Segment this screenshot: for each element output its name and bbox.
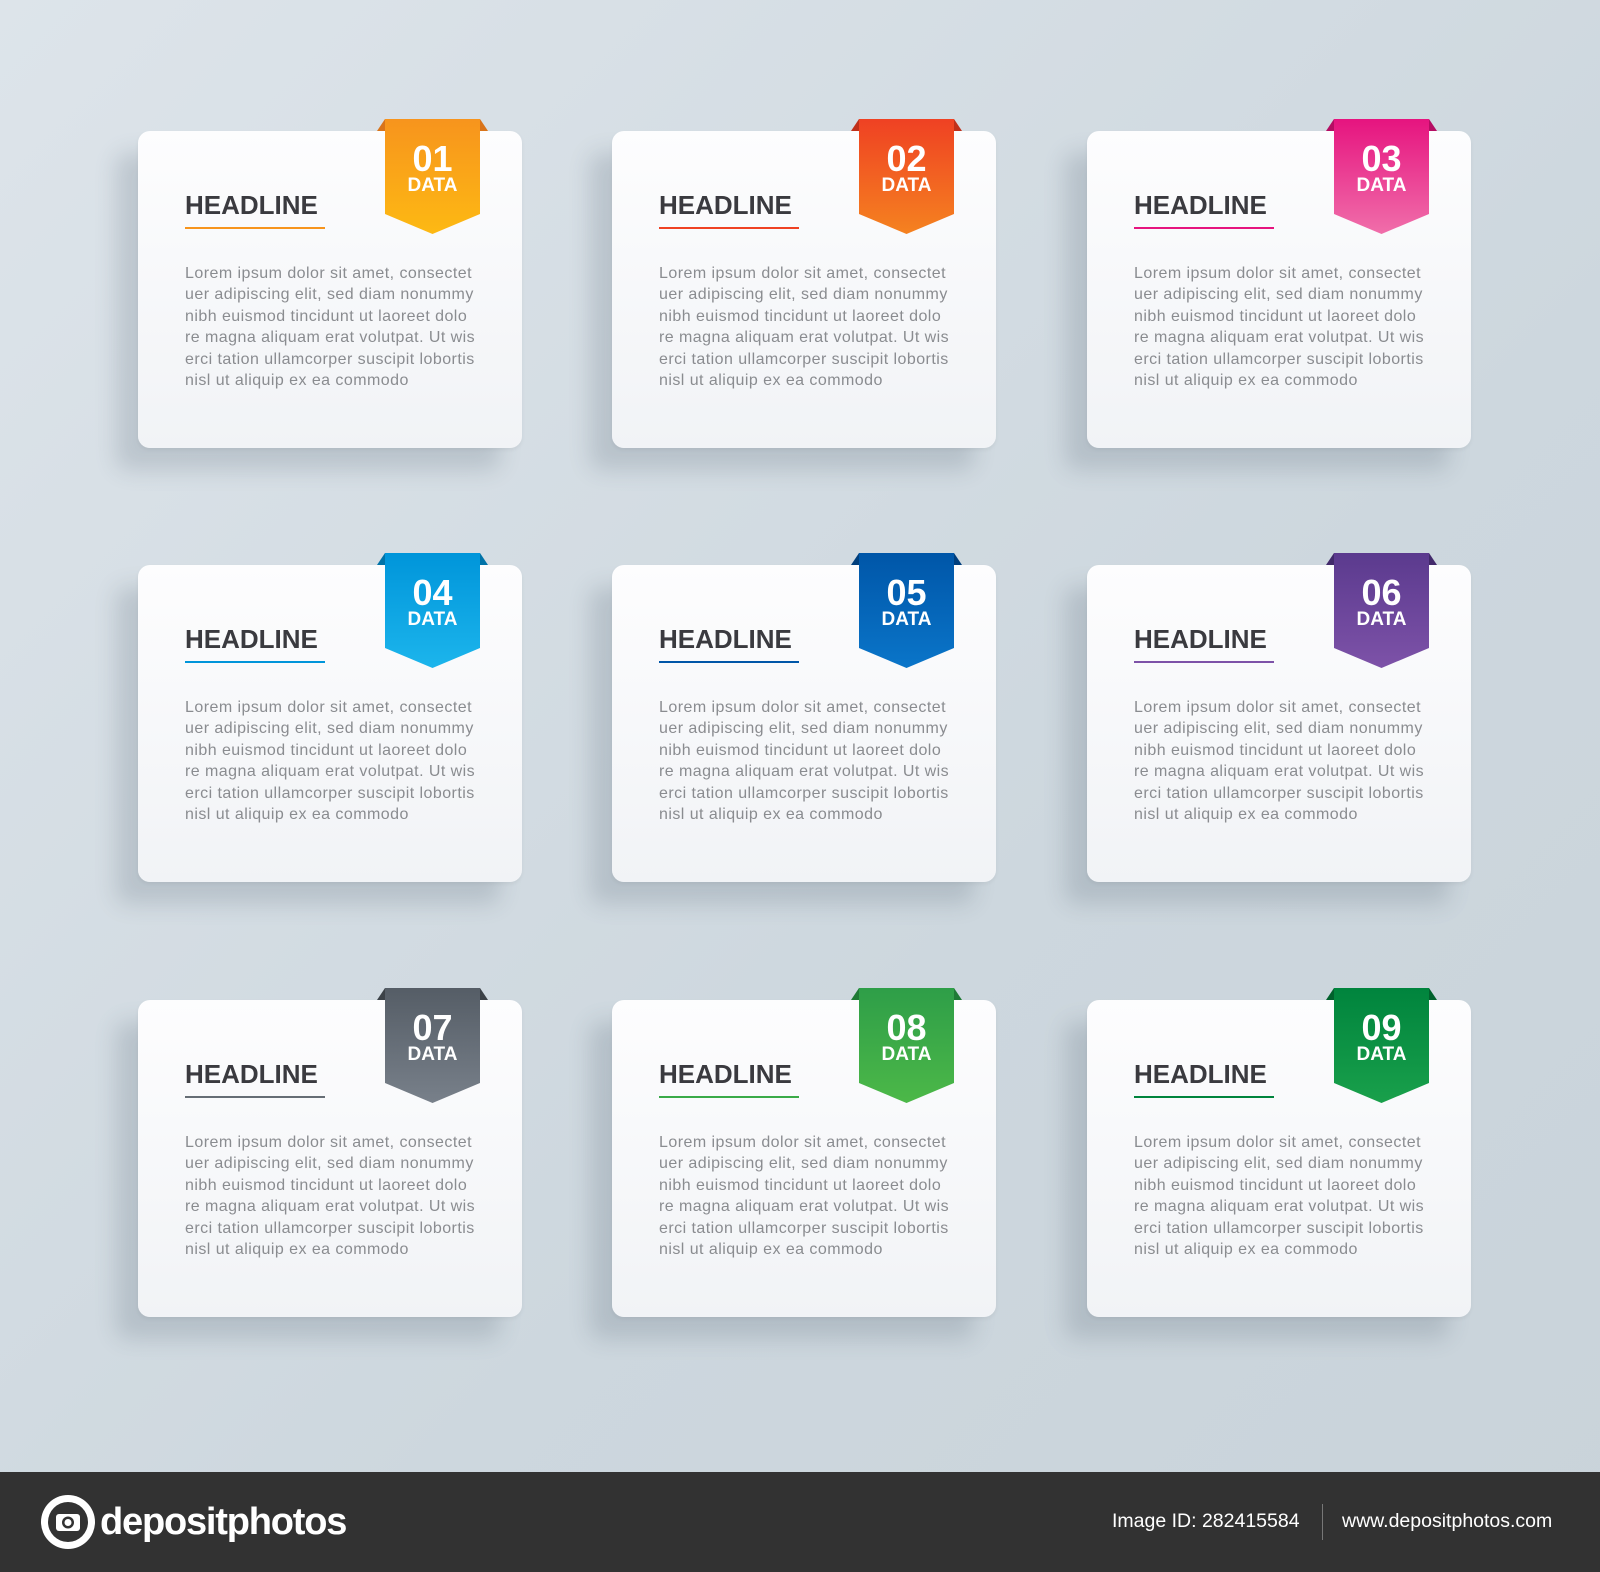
headline: HEADLINE bbox=[185, 190, 318, 220]
headline: HEADLINE bbox=[1134, 624, 1267, 654]
ribbon 03: 03 bbox=[1361, 138, 1402, 179]
body text: re magna aliquam erat volutpat. Ut wis bbox=[659, 763, 949, 780]
body text bbox=[185, 699, 475, 823]
body text: erci tation ullamcorper suscipit lobortis bbox=[659, 785, 949, 802]
image id: Image ID: 282415584 bbox=[1112, 1510, 1300, 1532]
body text: erci tation ullamcorper suscipit lobortis bbox=[185, 1220, 475, 1237]
body text: re magna aliquam erat volutpat. Ut wis bbox=[659, 329, 949, 346]
body text: uer adipiscing elit, sed diam nonummy bbox=[659, 286, 948, 303]
body text: nisl ut aliquip ex ea commodo bbox=[1134, 806, 1358, 823]
body text bbox=[185, 265, 475, 389]
body text: nisl ut aliquip ex ea commodo bbox=[1134, 372, 1358, 389]
ribbon 09: DATA bbox=[1357, 1044, 1407, 1065]
logo bbox=[41, 1495, 346, 1549]
body text bbox=[185, 1134, 475, 1258]
body text bbox=[1134, 699, 1424, 823]
body text: nisl ut aliquip ex ea commodo bbox=[659, 806, 883, 823]
ribbon 07: 07 bbox=[412, 1007, 453, 1048]
card 05 bbox=[612, 565, 996, 882]
body text: erci tation ullamcorper suscipit lobortis bbox=[185, 351, 475, 368]
card 03 bbox=[1087, 131, 1471, 448]
ribbon 08: DATA bbox=[882, 1044, 932, 1065]
card 01 bbox=[138, 131, 522, 448]
body text: uer adipiscing elit, sed diam nonummy bbox=[185, 286, 474, 303]
ribbon 04 bbox=[377, 553, 488, 668]
ribbon 06: DATA bbox=[1357, 609, 1407, 630]
body text: nisl ut aliquip ex ea commodo bbox=[1134, 1241, 1358, 1258]
body text: uer adipiscing elit, sed diam nonummy bbox=[659, 720, 948, 737]
ribbon 07 bbox=[377, 988, 488, 1103]
body text: erci tation ullamcorper suscipit lobortis bbox=[659, 1220, 949, 1237]
card 08 bbox=[612, 1000, 996, 1317]
body text: erci tation ullamcorper suscipit lobortis bbox=[1134, 351, 1424, 368]
body text: uer adipiscing elit, sed diam nonummy bbox=[659, 1155, 948, 1172]
body text: uer adipiscing elit, sed diam nonummy bbox=[1134, 1155, 1423, 1172]
body text bbox=[659, 1134, 949, 1258]
ribbon 05 bbox=[851, 553, 962, 668]
body text: Lorem ipsum dolor sit amet, consectet bbox=[1134, 1134, 1421, 1151]
body text: Lorem ipsum dolor sit amet, consectet bbox=[185, 265, 472, 282]
body text: Lorem ipsum dolor sit amet, consectet bbox=[659, 1134, 946, 1151]
ribbon 03: DATA bbox=[1357, 175, 1407, 196]
headline: HEADLINE bbox=[659, 1059, 792, 1089]
body text bbox=[1134, 1134, 1424, 1258]
body text: nisl ut aliquip ex ea commodo bbox=[185, 1241, 409, 1258]
body text: re magna aliquam erat volutpat. Ut wis bbox=[185, 329, 475, 346]
card 09 bbox=[1087, 1000, 1471, 1317]
ribbon 05: 05 bbox=[886, 572, 927, 613]
body text: erci tation ullamcorper suscipit lobortis bbox=[659, 351, 949, 368]
ribbon 09: 09 bbox=[1361, 1007, 1402, 1048]
headline: HEADLINE bbox=[1134, 190, 1267, 220]
footer bar bbox=[0, 1472, 1600, 1572]
ribbon 01: DATA bbox=[408, 175, 458, 196]
ribbon 04: DATA bbox=[408, 609, 458, 630]
body text: erci tation ullamcorper suscipit lobortis bbox=[1134, 1220, 1424, 1237]
body text: nisl ut aliquip ex ea commodo bbox=[659, 372, 883, 389]
body text: Lorem ipsum dolor sit amet, consectet bbox=[1134, 699, 1421, 716]
body text: nisl ut aliquip ex ea commodo bbox=[659, 1241, 883, 1258]
ribbon 02: DATA bbox=[882, 175, 932, 196]
body text: re magna aliquam erat volutpat. Ut wis bbox=[1134, 1198, 1424, 1215]
ribbon 01 bbox=[377, 119, 488, 234]
card 02 bbox=[612, 131, 996, 448]
body text: nibh euismod tincidunt ut laoreet dolo bbox=[659, 308, 941, 325]
body text: uer adipiscing elit, sed diam nonummy bbox=[1134, 720, 1423, 737]
body text: nisl ut aliquip ex ea commodo bbox=[185, 372, 409, 389]
headline: HEADLINE bbox=[185, 624, 318, 654]
ribbon 06 bbox=[1326, 553, 1437, 668]
body text: nibh euismod tincidunt ut laoreet dolo bbox=[659, 742, 941, 759]
card 04 bbox=[138, 565, 522, 882]
ribbon 02: 02 bbox=[886, 138, 927, 179]
body text: nibh euismod tincidunt ut laoreet dolo bbox=[185, 742, 467, 759]
body text: nibh euismod tincidunt ut laoreet dolo bbox=[185, 1177, 467, 1194]
body text: re magna aliquam erat volutpat. Ut wis bbox=[185, 763, 475, 780]
headline: HEADLINE bbox=[659, 190, 792, 220]
body text: erci tation ullamcorper suscipit lobortis bbox=[185, 785, 475, 802]
body text: uer adipiscing elit, sed diam nonummy bbox=[1134, 286, 1423, 303]
body text: erci tation ullamcorper suscipit lobortis bbox=[1134, 785, 1424, 802]
body text: nibh euismod tincidunt ut laoreet dolo bbox=[1134, 742, 1416, 759]
body text bbox=[659, 699, 949, 823]
headline: HEADLINE bbox=[185, 1059, 318, 1089]
ribbon 03 bbox=[1326, 119, 1437, 234]
body text: Lorem ipsum dolor sit amet, consectet bbox=[1134, 265, 1421, 282]
card 07 bbox=[138, 1000, 522, 1317]
ribbon 08 bbox=[851, 988, 962, 1103]
body text: Lorem ipsum dolor sit amet, consectet bbox=[185, 1134, 472, 1151]
body text: nibh euismod tincidunt ut laoreet dolo bbox=[659, 1177, 941, 1194]
card 06 bbox=[1087, 565, 1471, 882]
headline: HEADLINE bbox=[1134, 1059, 1267, 1089]
body text: re magna aliquam erat volutpat. Ut wis bbox=[185, 1198, 475, 1215]
ribbon 02 bbox=[851, 119, 962, 234]
ribbon 04: 04 bbox=[412, 572, 453, 613]
body text: Lorem ipsum dolor sit amet, consectet bbox=[185, 699, 472, 716]
body text: nibh euismod tincidunt ut laoreet dolo bbox=[185, 308, 467, 325]
body text: Lorem ipsum dolor sit amet, consectet bbox=[659, 265, 946, 282]
body text: nisl ut aliquip ex ea commodo bbox=[185, 806, 409, 823]
ribbon 06: 06 bbox=[1361, 572, 1402, 613]
body text: uer adipiscing elit, sed diam nonummy bbox=[185, 720, 474, 737]
logo: depositphotos bbox=[100, 1500, 346, 1542]
body text bbox=[659, 265, 949, 389]
icon: camera circle bbox=[41, 1495, 95, 1549]
body text: uer adipiscing elit, sed diam nonummy bbox=[185, 1155, 474, 1172]
ribbon 07: DATA bbox=[408, 1044, 458, 1065]
body text: nibh euismod tincidunt ut laoreet dolo bbox=[1134, 308, 1416, 325]
ribbon 01: 01 bbox=[412, 138, 453, 179]
body text: re magna aliquam erat volutpat. Ut wis bbox=[659, 1198, 949, 1215]
website: www.depositphotos.com bbox=[1342, 1510, 1552, 1532]
body text: re magna aliquam erat volutpat. Ut wis bbox=[1134, 329, 1424, 346]
body text bbox=[1134, 265, 1424, 389]
ribbon 09 bbox=[1326, 988, 1437, 1103]
headline: HEADLINE bbox=[659, 624, 792, 654]
body text: nibh euismod tincidunt ut laoreet dolo bbox=[1134, 1177, 1416, 1194]
body text: Lorem ipsum dolor sit amet, consectet bbox=[659, 699, 946, 716]
body text: re magna aliquam erat volutpat. Ut wis bbox=[1134, 763, 1424, 780]
ribbon 05: DATA bbox=[882, 609, 932, 630]
ribbon 08: 08 bbox=[886, 1007, 927, 1048]
